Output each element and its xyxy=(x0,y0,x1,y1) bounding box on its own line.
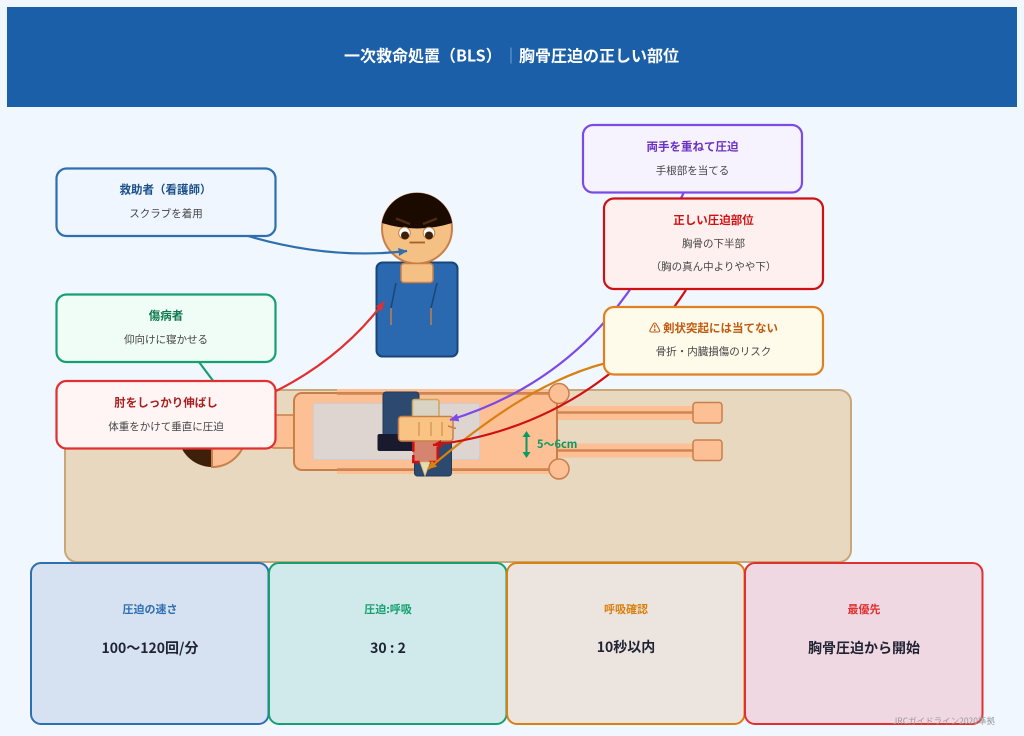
rescuer head xyxy=(382,193,452,264)
callout: elbows xyxy=(56,381,276,448)
callout: stacked hands xyxy=(583,125,802,192)
callout: correct site xyxy=(604,198,823,289)
stat card: breath check: 10秒以内 xyxy=(597,637,655,657)
title: 胸骨圧迫の正しい部位 xyxy=(519,42,679,66)
header banner xyxy=(7,7,1017,107)
callout: correct site: （胸の真ん中よりやや下） xyxy=(651,259,776,274)
stat card: compression to breath ratio xyxy=(269,563,506,724)
stat card: compression to breath ratio: 圧迫:呼吸 xyxy=(364,601,412,617)
title: ｜ xyxy=(503,42,519,66)
standing rescuer xyxy=(376,193,458,356)
rescuer arms and hands over chest xyxy=(378,392,456,476)
rescuer arm lower xyxy=(414,440,452,476)
xiphoid process xyxy=(420,462,430,476)
source note: JRCガイドライン2020準拠 xyxy=(893,715,995,727)
rescuer cuff xyxy=(378,434,414,451)
stat card: breath check xyxy=(507,563,744,724)
stat card: compression to breath ratio: 30 : 2 xyxy=(370,638,406,658)
patient lying on bed xyxy=(178,384,722,479)
callout: rescuer xyxy=(56,168,276,236)
patient leg lower xyxy=(547,440,722,460)
callout: rescuer: スクラブを着用 xyxy=(129,206,203,221)
arrow: xiphoid warning to xiphoid xyxy=(428,363,606,469)
callout: correct site: 正しい圧迫部位 xyxy=(673,212,754,228)
shoulder joints xyxy=(549,384,569,479)
callout: stacked hands: 手根部を当てる xyxy=(656,163,729,178)
rescuer body xyxy=(376,262,458,356)
arrow: elbow label to arm xyxy=(272,302,384,393)
stat card: compression rate: 圧迫の速さ xyxy=(122,601,178,617)
depth indicator: 5〜6cm xyxy=(537,436,577,452)
title: 一次救命処置（BLS） xyxy=(344,42,502,66)
callout: patient xyxy=(56,294,276,362)
scrub collar lines xyxy=(391,283,437,325)
stat card: compression rate xyxy=(31,563,268,724)
callout: elbows: 肘をしっかり伸ばし xyxy=(114,394,218,410)
patient torso xyxy=(294,389,557,474)
callout: correct site: 胸骨の下半部 xyxy=(682,236,745,251)
sternum zone xyxy=(412,400,439,430)
callout: patient: 傷病者 xyxy=(149,308,183,324)
arrow: hands label to hands xyxy=(450,192,684,420)
patient leg upper xyxy=(547,402,722,423)
callout: stacked hands: 両手を重ねて圧迫 xyxy=(646,138,739,154)
rescuer arm upper xyxy=(383,392,419,436)
arrow: patient label xyxy=(199,362,214,382)
depth indicator xyxy=(522,431,577,458)
callout: rescuer: 救助者（看護師） xyxy=(120,182,212,198)
stat card: top priority: 最優先 xyxy=(848,601,880,617)
correct compression area xyxy=(413,441,438,462)
callout: xiphoid warning xyxy=(604,307,823,374)
bed xyxy=(65,390,851,562)
arrow: rescuer label to face xyxy=(248,236,407,253)
callout: elbows: 体重をかけて垂直に圧迫 xyxy=(108,419,224,434)
arrow: correct site label to site xyxy=(433,290,686,445)
stat card: top priority xyxy=(745,563,982,724)
stat card: breath check: 呼吸確認 xyxy=(604,601,648,617)
rescuer neck xyxy=(401,264,433,282)
stacked hands xyxy=(398,416,456,441)
callout: patient: 仰向けに寝かせる xyxy=(124,332,208,347)
stat card: top priority: 胸骨圧迫から開始 xyxy=(808,638,920,658)
patient neck xyxy=(270,415,304,448)
callout: xiphoid warning: 骨折・内臓損傷のリスク xyxy=(656,344,771,359)
patient head xyxy=(178,399,246,467)
callout: xiphoid warning: ⚠ 剣状突起には当てない xyxy=(649,320,778,336)
stat card: compression rate: 100〜120回/分 xyxy=(102,638,198,658)
